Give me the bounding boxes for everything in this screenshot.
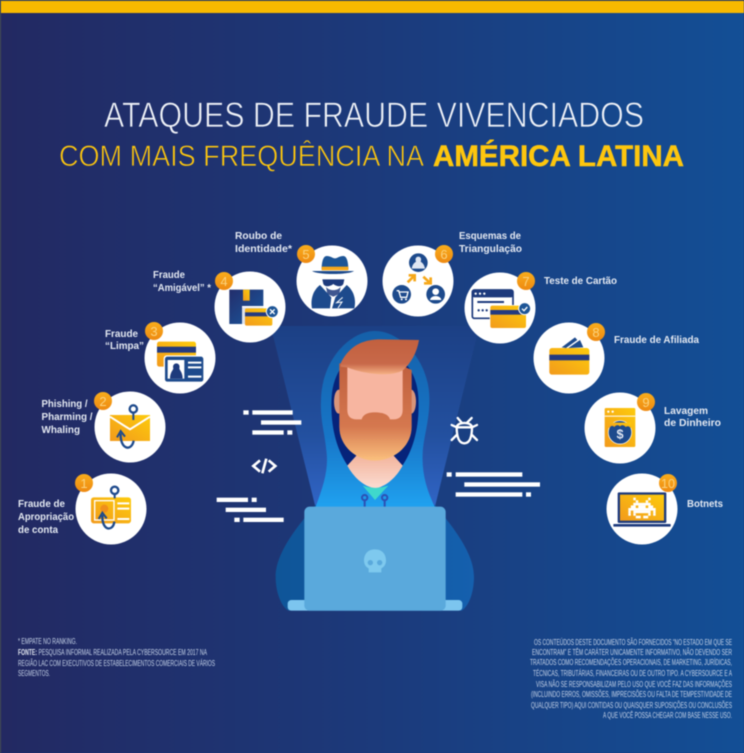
badge 9: 9 — [642, 395, 650, 410]
badge 2: 2 — [99, 394, 107, 409]
badge 6: 6 — [440, 247, 448, 262]
label 2: Whaling — [42, 425, 80, 436]
label 2: Phishing / — [42, 399, 88, 410]
top yellow bar — [0, 1, 744, 13]
label 5: Identidade* — [235, 244, 292, 255]
label 4 — [153, 270, 211, 294]
label 2: Pharming / — [42, 412, 93, 423]
label 5: Roubo de — [235, 231, 282, 242]
circle 10 — [606, 474, 678, 544]
icon: laptop with invader — [613, 492, 671, 527]
circle 5 — [296, 246, 368, 316]
title line 2 light: COM MAIS FREQUÊNCIA NA — [59, 140, 424, 173]
badge 3: 3 — [150, 324, 158, 339]
face — [347, 367, 403, 419]
label 1: de conta — [18, 525, 58, 536]
item 10: botnets — [606, 474, 723, 544]
badge 1: 1 — [80, 476, 88, 491]
laptop lid — [304, 507, 446, 611]
footnote left: REGIÃO LAC COM EXECUTIVOS DE ESTABELECIMENTOS COMERCIAIS DE VÁRIOS — [18, 659, 215, 668]
label 1: Fraude de — [18, 499, 65, 510]
label 2 — [42, 399, 93, 436]
hood opening — [331, 350, 419, 467]
badge 7: 7 — [522, 274, 530, 289]
icon: spy — [311, 256, 355, 308]
circle 6 — [382, 246, 454, 316]
label 10: Botnets — [687, 499, 723, 510]
circle 2 — [94, 392, 166, 462]
footnote left: * EMPATE NO RANKING. — [18, 637, 77, 646]
label 1 — [18, 499, 74, 536]
skull icon — [364, 549, 386, 572]
central hacker illustration — [217, 326, 540, 611]
code lines right — [447, 472, 540, 497]
circle 1 — [76, 474, 146, 544]
label 3 — [105, 329, 144, 352]
badge 5: 5 — [302, 247, 310, 262]
laptop base — [288, 600, 462, 611]
hoodie body — [276, 505, 474, 611]
circle 7 — [464, 272, 536, 344]
item 9: lavagem de dinheiro — [584, 392, 721, 464]
circle 8 — [534, 322, 604, 394]
badge 10: 10 — [661, 476, 675, 491]
code lines left top — [243, 410, 301, 435]
icon: washing machine with dollar: $ — [616, 427, 624, 441]
item 6: esquemas de triangulação — [382, 231, 522, 316]
hair — [341, 339, 419, 374]
icon: card and id — [157, 342, 205, 383]
circle 4 — [214, 272, 286, 342]
item 2: phishing — [42, 392, 166, 462]
badge 4: 4 — [220, 274, 228, 289]
label 9 — [664, 406, 721, 429]
label 4: “Amigável” * — [153, 283, 211, 294]
bug icon — [452, 418, 477, 443]
code lines left bottom — [217, 498, 284, 522]
icon: envelope with hook — [110, 405, 150, 448]
label 6: Esquemas de — [459, 231, 521, 242]
item 3: fraude limpa — [105, 322, 216, 394]
icon: browser and card — [472, 290, 531, 328]
icon: wallet with cards — [549, 337, 589, 375]
item 4: fraude amigável — [153, 270, 286, 342]
label 3: Fraude — [105, 329, 138, 340]
label 3: “Limpa” — [105, 341, 144, 352]
item 7: teste de cartão — [464, 272, 617, 344]
label 1: Apropriação — [18, 512, 74, 523]
label 7: Teste de Cartão — [544, 276, 617, 287]
item 1: fraude de apropriação de conta — [18, 474, 146, 544]
code tag icon — [253, 459, 275, 473]
badge 8 — [587, 323, 605, 341]
title — [59, 96, 684, 173]
hoodie strings — [362, 495, 387, 507]
title line 1: ATAQUES DE FRAUDE VIVENCIADOS — [104, 96, 644, 135]
label 9: Lavagem — [664, 406, 708, 417]
neck — [347, 452, 403, 488]
beard and sideburns — [339, 363, 412, 461]
label 4: Fraude — [153, 270, 185, 281]
footnote left — [18, 637, 215, 678]
title line 2 bold: AMÉRICA LATINA — [433, 139, 684, 173]
ears — [334, 390, 416, 414]
label 9: de Dinheiro — [664, 418, 721, 429]
disclaimer right — [530, 638, 732, 720]
item 8: fraude de afiliada — [534, 322, 699, 394]
item 5: roubo de identidade — [235, 231, 368, 316]
hood — [315, 331, 435, 507]
light beam — [267, 326, 483, 507]
label 6 — [459, 231, 522, 255]
icon: id card with hook — [91, 487, 131, 528]
circle 3 — [144, 322, 216, 394]
icon: triangle of people — [392, 253, 445, 304]
badge 8: 8 — [592, 325, 600, 340]
icon: package and card — [229, 290, 278, 326]
circle 9 — [584, 392, 656, 464]
label 8: Fraude de Afiliada — [614, 335, 699, 346]
label 6: Triangulação — [459, 244, 522, 255]
label 5 — [235, 231, 292, 255]
shirt collar — [363, 486, 388, 500]
footnote left: SEGMENTOS. — [18, 669, 50, 678]
footnote left: FONTE: PESQUISA INFORMAL REALIZADA PELA CYBERSOURCE EM 2017 NA — [18, 648, 208, 657]
badge 7 — [517, 272, 535, 290]
